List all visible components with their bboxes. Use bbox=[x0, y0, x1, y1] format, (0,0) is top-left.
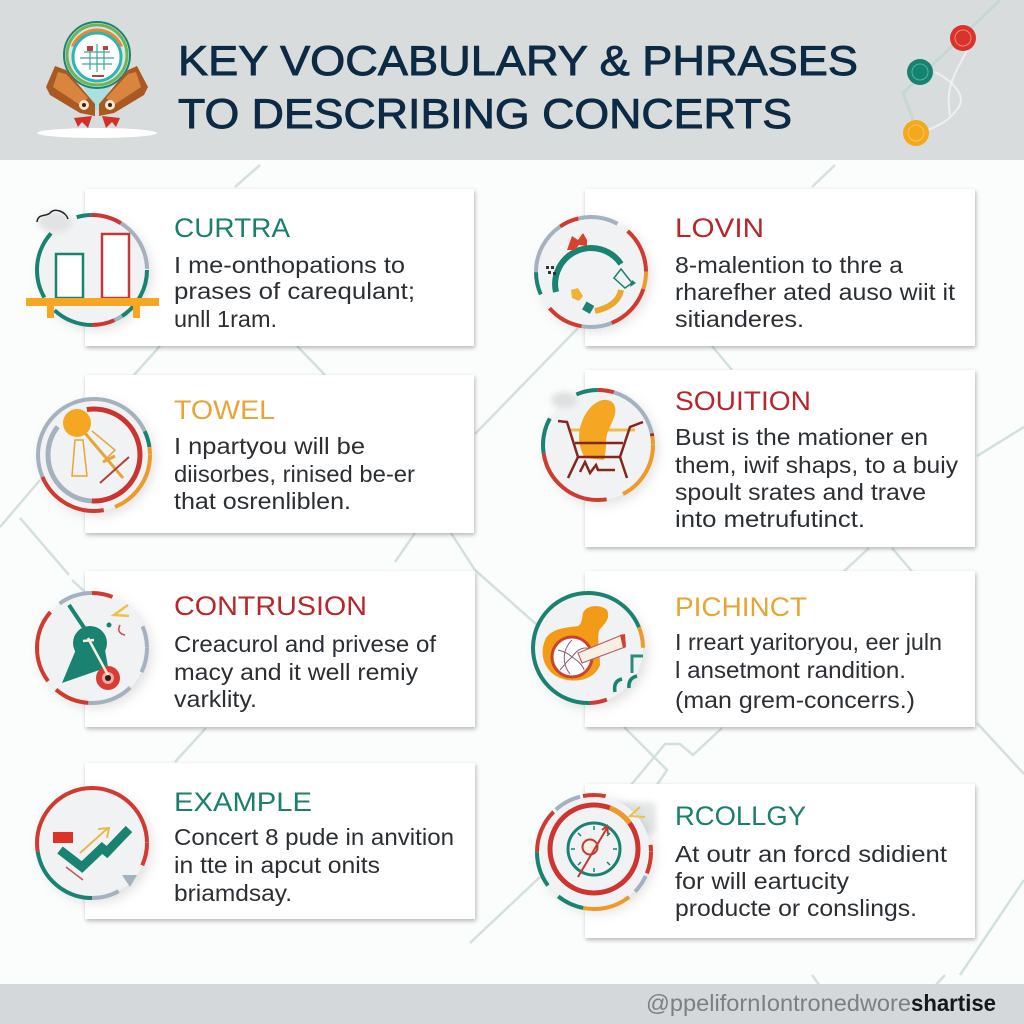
icon: bars on a shelf bbox=[26, 210, 159, 325]
panel: curtra bbox=[26, 189, 474, 346]
panel: towel bbox=[38, 375, 474, 533]
text block: Bust is the mationer en bbox=[675, 424, 928, 450]
panel: souition bbox=[543, 370, 975, 547]
icon: guitar bbox=[37, 593, 147, 703]
heading: RCOLLGY bbox=[675, 801, 806, 831]
text block: prases of carequlant; bbox=[174, 278, 415, 304]
text block bbox=[675, 424, 959, 532]
text block: varklity. bbox=[174, 686, 257, 712]
text block: macy and it well remiy bbox=[174, 659, 419, 685]
text block: unll 1ram. bbox=[174, 306, 277, 332]
footer handle: shartise bbox=[911, 990, 996, 1016]
text block: Concert 8 pude in anvition bbox=[174, 824, 454, 850]
panel: contrusion bbox=[37, 571, 475, 727]
icon: compass tools bbox=[38, 399, 150, 511]
text block: into metrufutinct. bbox=[675, 506, 865, 532]
title: KEY VOCABULARY & PHRASES bbox=[178, 37, 858, 84]
text block: Creacurol and privese of bbox=[174, 631, 437, 657]
heading: TOWEL bbox=[174, 395, 275, 425]
heading: LOVIN bbox=[675, 213, 764, 243]
icon: connected coloured dots bbox=[903, 0, 1000, 146]
text block: sitianderes. bbox=[675, 306, 804, 332]
text block: for will eartucity bbox=[675, 868, 850, 894]
text block bbox=[174, 252, 415, 332]
text block: diisorbes, rinised be-er bbox=[174, 461, 415, 487]
text block: spoult srates and trave bbox=[675, 479, 926, 505]
icon: clock dial bbox=[537, 795, 656, 909]
text block: I me-onthopations to bbox=[174, 252, 405, 278]
heading: CONTRUSION bbox=[174, 591, 367, 621]
heading: EXAMPLE bbox=[174, 787, 312, 817]
icon: drum and music notes bbox=[533, 593, 643, 703]
heading: CURTRA bbox=[174, 213, 290, 243]
panel: rcollgy bbox=[537, 784, 975, 938]
text block bbox=[174, 433, 415, 514]
logo: horns and globe emblem bbox=[37, 22, 157, 138]
text block: rharefher ated auso wiit it bbox=[675, 279, 956, 305]
footer handle: @ppelifornIontronedwore bbox=[646, 990, 911, 1016]
text block: 8-malention to thre a bbox=[675, 252, 903, 278]
text block: that osrenliblen. bbox=[174, 488, 351, 514]
text block: them, iwif shaps, to a buiy bbox=[675, 452, 959, 478]
text block: I npartyou will be bbox=[174, 433, 365, 459]
text block: (man grem-concerrs.) bbox=[675, 687, 915, 713]
icon: cart with orange shape bbox=[543, 390, 653, 500]
text block bbox=[174, 631, 437, 712]
icon: circular arrows bbox=[536, 217, 646, 327]
text block bbox=[174, 824, 454, 906]
text block bbox=[675, 629, 942, 713]
text block: I rreart yaritoryou, eer juln bbox=[675, 629, 942, 655]
text block: briamdsay. bbox=[174, 880, 292, 906]
title: TO DESCRIBING CONCERTS bbox=[178, 90, 792, 137]
panel: lovin bbox=[536, 189, 975, 346]
heading: SOUITION bbox=[675, 386, 811, 416]
text block: in tte in apcut onits bbox=[174, 852, 380, 878]
panel: example bbox=[37, 763, 475, 919]
footer band bbox=[0, 984, 1024, 1024]
text block: producte or conslings. bbox=[675, 895, 917, 921]
icon: check mark with arrow bbox=[37, 788, 147, 898]
heading: PICHINCT bbox=[675, 592, 807, 622]
text block bbox=[675, 252, 956, 332]
text block bbox=[675, 841, 948, 921]
text block: l ansetmont randition. bbox=[675, 657, 906, 683]
header band bbox=[0, 0, 1024, 160]
title bbox=[178, 37, 858, 137]
panel: pichinct bbox=[533, 571, 975, 727]
text block: At outr an forcd sdidient bbox=[675, 841, 948, 867]
